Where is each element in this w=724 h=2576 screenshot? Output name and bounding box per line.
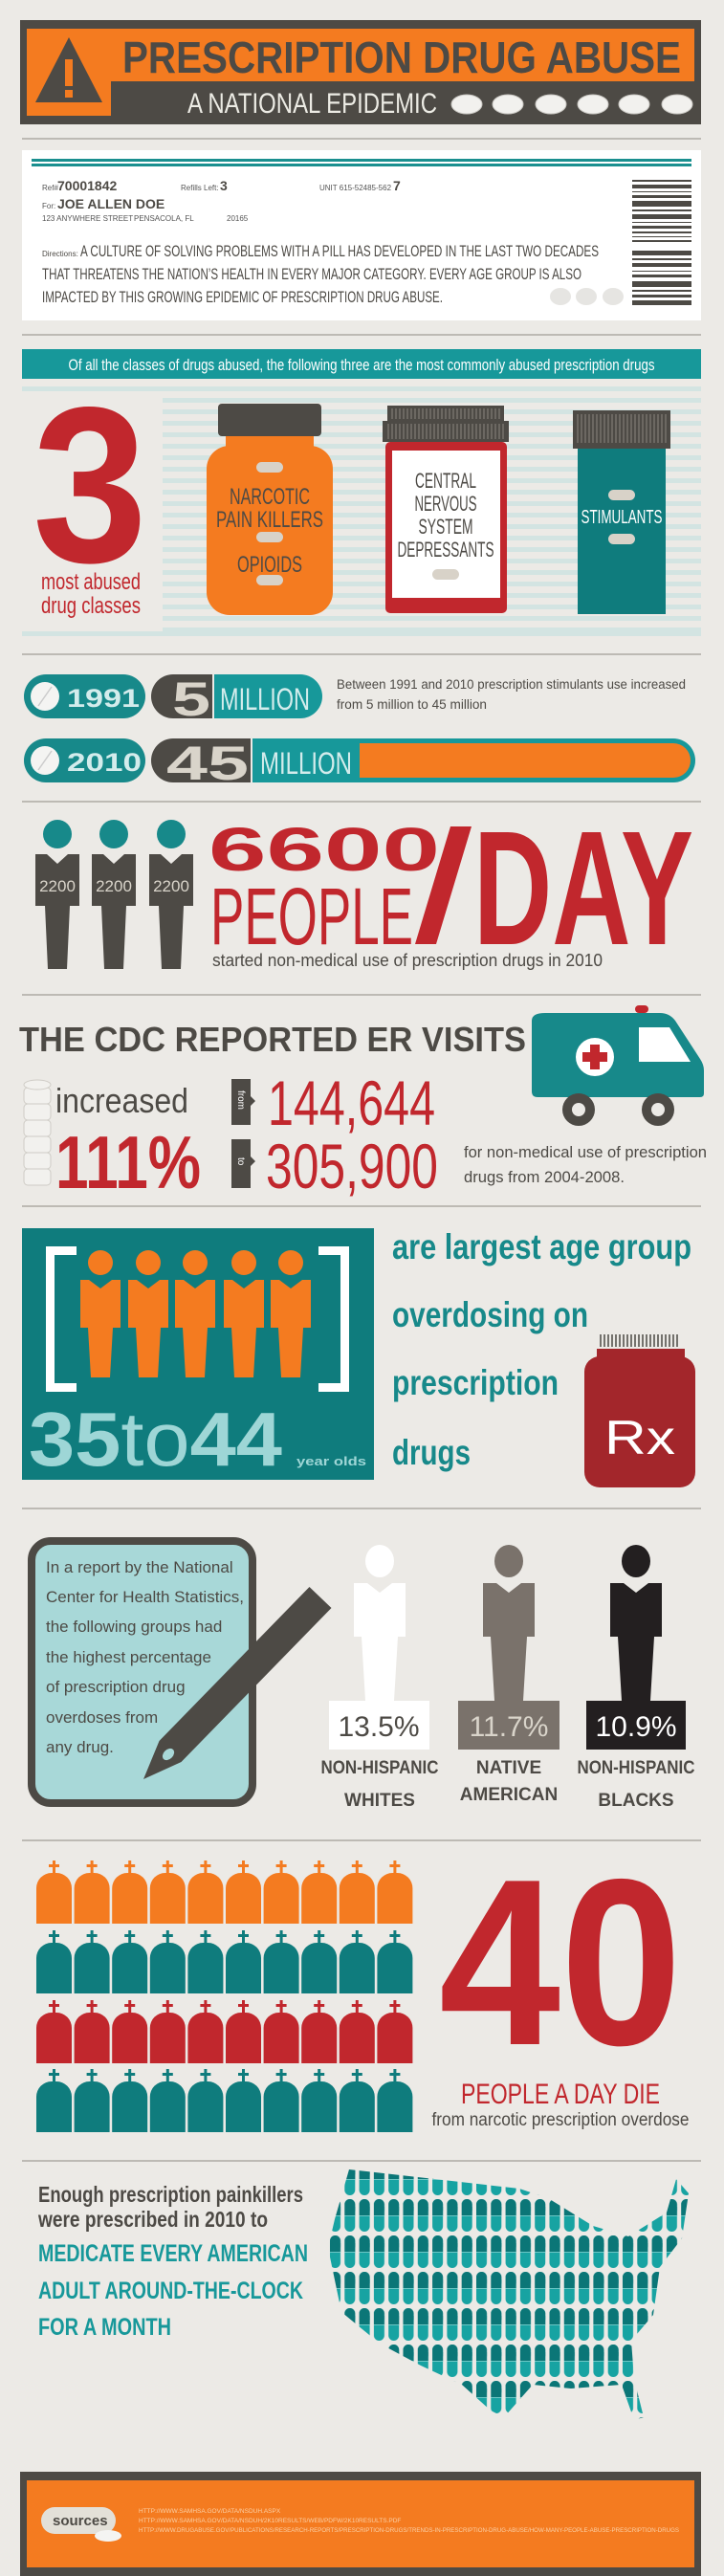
text: enough painkillers: ADULT AROUND-THE-CLOCK	[38, 2278, 303, 2304]
figure: non-hispanic blacks	[578, 1545, 695, 1811]
caption: started non-medical use: started non-medical use of prescription drugs in 2010	[212, 951, 603, 970]
figure: non-hispanic blacks: BLACKS	[598, 1791, 674, 1811]
text: largest age group: overdosing on	[392, 1295, 588, 1334]
bottle: stimulants	[573, 410, 670, 614]
row: 2010 45 million: 2010	[67, 748, 142, 777]
text block: directions	[42, 242, 599, 306]
icon: pencil	[143, 1587, 331, 1779]
bottle: narcotic pain killers: NARCOTIC	[230, 484, 310, 510]
figure: non-hispanic whites: 13.5%	[338, 1711, 420, 1743]
footer: sources	[20, 2472, 701, 2576]
panel: prescription label: Ref#	[42, 184, 58, 192]
caption: ER visits: for non-medical use of prescription	[464, 1143, 707, 1161]
big number 3: most abused	[41, 569, 141, 595]
text: enough painkillers: Enough prescription painkillers	[38, 2182, 303, 2207]
bottle: CNS depressants: NERVOUS	[415, 492, 476, 516]
caption: ER visits: drugs from 2004-2008.	[464, 1168, 625, 1186]
panel: prescription label: 3	[220, 178, 228, 193]
text: largest age group	[392, 1227, 691, 1472]
stat: 40 people a day die: from narcotic prescription overdose	[432, 2110, 689, 2130]
headline: 6600 people/day: PEOPLE	[210, 871, 413, 961]
stat: 40 people a day die: 40	[439, 1829, 682, 2095]
stat: from 144,644 to 305,900: 144,644	[268, 1068, 435, 1138]
callout: NCHS report: of prescription drug	[46, 1678, 186, 1696]
panel: 35 to 44: 35to44	[29, 1397, 283, 1482]
panel: prescription label: Refills Left:	[181, 184, 219, 192]
row: 2010 45 million: 45	[166, 737, 249, 790]
stat: increased 111%	[55, 1081, 201, 1204]
panel: prescription label: UNIT 615-52485-562	[319, 184, 392, 192]
panel: prescription label: 20165	[227, 214, 249, 223]
footer: sources: HTTP://WWW.DRUGABUSE.GOV/PUBLICATIONS/RESEARCH-REPORTS/PRESCRIPTION-DRUGS/TRENDS-IN-PRESCRIPTION-DRUG-ABUSE/HOW-MANY-PEOPLE-ABUSE-PRESCRIPTION-DRUGS	[139, 2527, 680, 2534]
panel: prescription label: JOE ALLEN DOE	[57, 196, 165, 211]
callout: NCHS report: the highest percentage	[46, 1648, 211, 1666]
bottle: stimulants: STIMULANTS	[581, 507, 662, 528]
footer: sources: HTTP://WWW.SAMHSA.GOV/DATA/NSDUH.ASPX	[139, 2508, 281, 2515]
text: largest age group: prescription	[392, 1363, 559, 1402]
icon: three people 2200: 2200	[96, 877, 132, 895]
callout: NCHS report: any drug.	[46, 1738, 114, 1756]
figure: native american: AMERICAN	[460, 1785, 558, 1805]
icon: pills row	[451, 95, 692, 114]
icon: pill stack	[24, 1080, 51, 1185]
bottle: CNS depressants: SYSTEM	[419, 515, 472, 539]
icon: warning triangle	[35, 37, 102, 102]
stat: increased 111%: 111%	[55, 1120, 201, 1204]
text block: directions: Directions:	[42, 250, 78, 258]
icon: Rx bottle: Rx	[604, 1411, 675, 1464]
stat: from 144,644 to 305,900	[231, 1068, 438, 1201]
header banner	[20, 20, 701, 124]
callout: NCHS report: In a report by the National	[46, 1558, 233, 1576]
icon: Rx bottle	[584, 1334, 695, 1487]
subtitle: A NATIONAL EPIDEMIC	[187, 88, 437, 120]
text: largest age group: drugs	[392, 1433, 471, 1472]
stat: from 144,644 to 305,900: from	[235, 1090, 246, 1110]
figure: native american: NATIVE	[476, 1758, 541, 1778]
bottle: narcotic pain killers: PAIN KILLERS	[216, 507, 323, 533]
row: 1991 5 million: MILLION	[220, 682, 310, 716]
row: 2010 45 million: MILLION	[260, 746, 352, 781]
heading: CDC ER visits: THE CDC REPORTED ER VISITS	[19, 1020, 526, 1059]
row: 1991 5 million: 5	[172, 672, 210, 726]
text: stimulants increase: from 5 million to 45 million	[337, 696, 487, 712]
icon: three people 2200	[35, 820, 193, 969]
figure: non-hispanic whites: NON-HISPANIC	[321, 1758, 439, 1778]
text: enough painkillers: MEDICATE EVERY AMERICAN	[38, 2240, 308, 2267]
row: 2010 45 million	[24, 737, 695, 790]
big number 3: drug classes	[41, 593, 141, 619]
stat: from 144,644 to 305,900: 305,900	[266, 1131, 438, 1201]
icon: ambulance	[532, 1005, 704, 1126]
map: US made of pills	[328, 2169, 689, 2420]
panel: 35 to 44	[22, 1228, 374, 1482]
figure: non-hispanic blacks: NON-HISPANIC	[578, 1758, 695, 1778]
stat: 40 people a day die: PEOPLE A DAY DIE	[461, 2079, 660, 2110]
callout: NCHS report: Center for Health Statistics,	[46, 1588, 244, 1606]
figure: non-hispanic whites	[321, 1545, 439, 1811]
panel: prescription label: PENSACOLA, FL	[134, 214, 194, 223]
panel: 35 to 44: year olds	[296, 1454, 366, 1468]
icon: three people 2200: 2200	[153, 877, 189, 895]
stat: from 144,644 to 305,900: to	[235, 1157, 246, 1166]
figure: native american: 11.7%	[470, 1711, 548, 1743]
stat: increased 111%: increased	[55, 1081, 188, 1120]
panel: prescription label: For:	[42, 202, 55, 210]
figure: non-hispanic whites: WHITES	[344, 1791, 415, 1811]
figure: native american	[458, 1545, 559, 1805]
row: 1991 5 million	[24, 672, 322, 726]
callout: NCHS report	[32, 1541, 331, 1803]
text: enough painkillers	[37, 2182, 308, 2341]
bottle: CNS depressants: DEPRESSANTS	[398, 538, 494, 561]
text: stimulants increase	[337, 676, 686, 712]
bottle: narcotic pain killers	[207, 404, 333, 615]
text: enough painkillers: were prescribed in 2010 to	[37, 2207, 268, 2232]
headline: 6600 people/day	[208, 798, 693, 980]
text: enough painkillers: FOR A MONTH	[38, 2314, 171, 2341]
panel: prescription label: 123 ANYWHERE STREET	[42, 214, 133, 223]
teal banner heading	[22, 349, 701, 379]
callout: NCHS report: the following groups had	[46, 1618, 222, 1636]
bottle: narcotic pain killers: OPIOIDS	[237, 552, 302, 578]
icon: barcode	[632, 180, 691, 305]
headline: 6600 people/day: 6600	[208, 815, 440, 884]
text block: directions: IMPACTED BY THIS GROWING EPIDEMIC OF PRESCRIPTION DRUG ABUSE.	[42, 288, 443, 306]
footer: sources: HTTP://WWW.SAMHSA.GOV/DATA/NSDUH/2K10RESULTS/WEB/PDFW/2K10RESULTS.PDF	[139, 2518, 401, 2524]
panel: prescription label: 70001842	[57, 178, 118, 193]
figure: non-hispanic blacks: 10.9%	[595, 1711, 677, 1743]
row: 1991 5 million: 1991	[67, 684, 140, 713]
chart: 40 bottle icons grid	[36, 1860, 412, 2132]
icon: three people 2200: 2200	[39, 877, 76, 895]
bottle: CNS depressants: CENTRAL	[415, 469, 476, 493]
callout: NCHS report: overdoses from	[46, 1708, 158, 1727]
panel: prescription label: 7	[393, 178, 401, 193]
panel: prescription label	[22, 150, 701, 320]
big number 3: 3	[33, 362, 147, 609]
text: stimulants increase: Between 1991 and 2010 prescription stimulants use increased	[337, 676, 686, 692]
bottle: CNS depressants	[383, 406, 509, 613]
footer: sources: sources	[53, 2513, 108, 2529]
caption: ER visits	[464, 1143, 707, 1186]
